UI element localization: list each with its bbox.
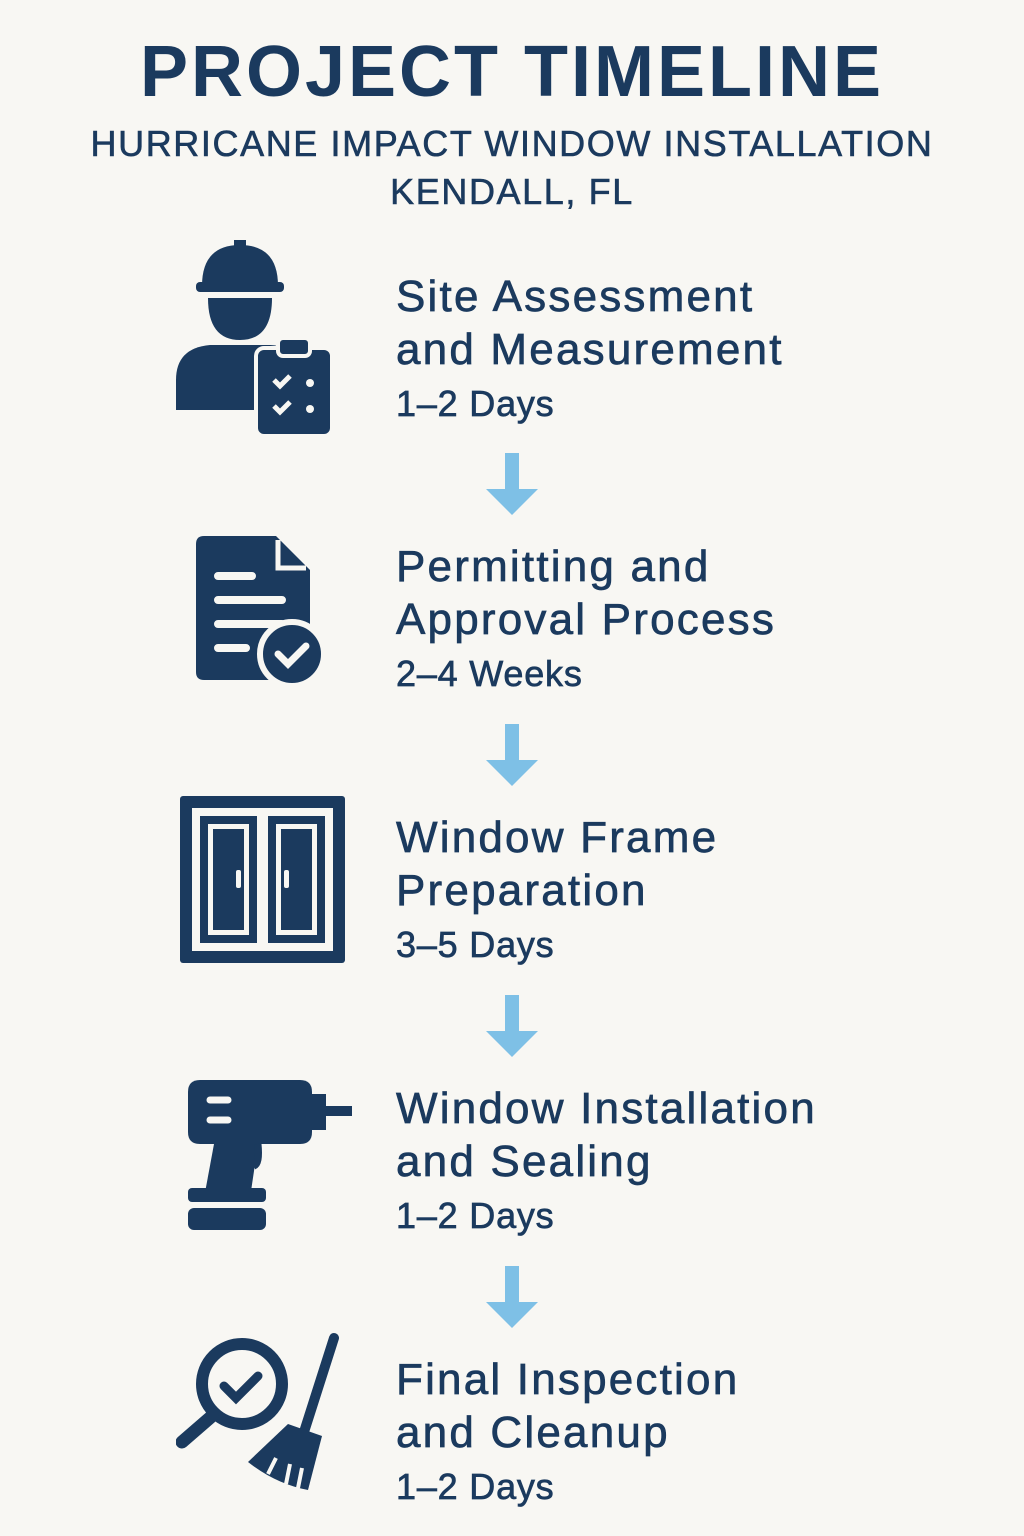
subtitle [90,123,933,212]
step 4 text: Window Installation [396,1084,817,1133]
step 3 text: Window Frame [396,813,718,862]
step 4 text [396,1084,817,1236]
step 2 text [396,542,776,694]
title: PROJECT TIMELINE [140,32,884,112]
step 1 text: and Measurement [396,325,784,374]
step 3 text: Preparation [396,866,648,915]
step 3 text [396,813,718,965]
step 2 text: Permitting and [396,542,711,591]
step 5 text: and Cleanup [396,1408,670,1457]
icon: document with check [196,536,321,683]
step 4 text: 1–2 Days [396,1195,554,1236]
step 4 text: and Sealing [396,1137,653,1186]
icon: magnifier and broom [176,1333,339,1490]
step 5 text [396,1355,739,1507]
arrow 1 [486,453,538,515]
step 5 text: Final Inspection [396,1355,739,1404]
arrow 3 [486,995,538,1057]
step 1 text: 1–2 Days [396,383,554,424]
arrow 4 [486,1266,538,1328]
step 1 text [396,272,784,424]
icon: window frame [180,796,345,963]
subtitle: KENDALL, FL [390,171,634,212]
step 3 text: 3–5 Days [396,924,554,965]
arrow 2 [486,724,538,786]
icon: worker with clipboard [176,240,330,434]
step 2 text: 2–4 Weeks [396,653,583,694]
step 5 text: 1–2 Days [396,1466,554,1507]
subtitle: HURRICANE IMPACT WINDOW INSTALLATION [90,123,933,164]
step 1 text: Site Assessment [396,272,754,321]
step 2 text: Approval Process [396,595,776,644]
icon: drill [188,1080,352,1230]
